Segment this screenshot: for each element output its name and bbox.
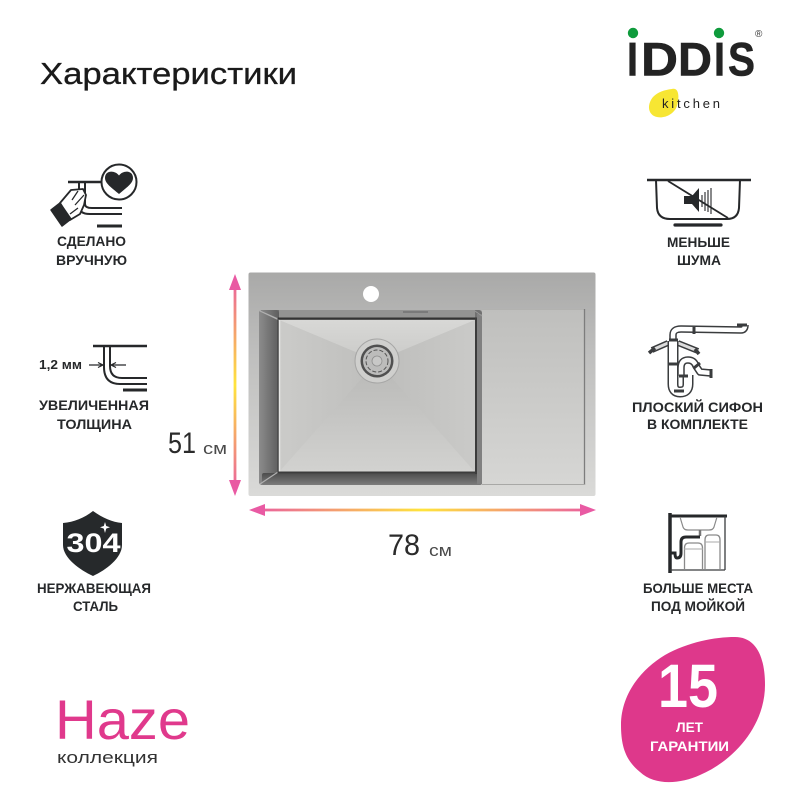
label: more space [643,580,753,614]
panel: flat siphon [632,325,763,432]
icon: sink with muted speaker [647,180,751,225]
width label: см [429,541,452,560]
label: stainless steel [37,580,151,614]
title: Характеристики [40,56,297,91]
arrow: width dimension [249,504,596,516]
panel: handmade [51,164,136,268]
icon: cabinet under sink [670,513,727,573]
label: handmade: ВРУЧНУЮ [56,252,127,268]
width label [388,529,452,562]
height label [168,427,227,460]
bowl walls [259,310,482,485]
height label: см [203,439,227,458]
logo: IDDIS kitchen: S [728,32,755,86]
warranty badge: ЛЕТ [676,719,703,735]
logo: IDDIS kitchen: I [714,32,725,86]
sink illustration [248,272,596,496]
label: less noise: МЕНЬШЕ [667,234,730,250]
logo: IDDIS kitchen: D [678,32,712,86]
label: less noise: ШУМА [677,252,721,268]
label: flat siphon: ПЛОСКИЙ СИФОН [632,398,763,415]
logo: IDDIS kitchen [627,28,763,117]
label: thickness: УВЕЛИЧЕННАЯ [39,397,149,413]
width label: 78 [388,529,420,562]
panel: more space [643,513,753,614]
drain [355,339,399,383]
collection name: коллекция [57,748,158,767]
label: handmade: СДЕЛАНО [57,233,126,249]
overflow slot [403,311,428,313]
label: thickness: ТОЛЩИНА [57,416,132,432]
icon: siphon [649,325,747,392]
logo: IDDIS kitchen: ® [755,29,763,40]
label: less noise [667,234,730,268]
bowl floor facets [278,318,477,474]
label: stainless steel: НЕРЖАВЕЮЩАЯ [37,580,151,596]
panel: stainless steel [37,511,151,614]
label: handmade [56,233,127,268]
warranty badge: ГАРАНТИИ [650,738,729,754]
icon: hand and heart [51,164,136,226]
warranty badge [621,637,765,782]
drainboard [482,309,585,485]
icon: shield 304: 304 [66,528,120,558]
arrow: height dimension [229,274,241,496]
panel: thickness [39,346,149,432]
label: more space: БОЛЬШЕ МЕСТА [643,580,753,596]
icon: steel thickness profile: 1,2 мм [39,357,82,372]
label: thickness [39,397,149,432]
height label: 51 [168,427,196,460]
label: stainless steel: СТАЛЬ [73,598,118,614]
logo: IDDIS kitchen: I [627,32,638,86]
collection name: Haze [55,688,190,751]
warranty badge: 15 [658,652,718,720]
logo: IDDIS kitchen: kitchen [662,96,720,111]
label: flat siphon: В КОМПЛЕКТЕ [647,416,748,432]
panel: less noise [647,180,751,268]
logo: IDDIS kitchen: D [641,32,678,86]
label: more space: ПОД МОЙКОЙ [651,597,745,614]
label: flat siphon [632,398,763,432]
tap hole [363,286,379,302]
